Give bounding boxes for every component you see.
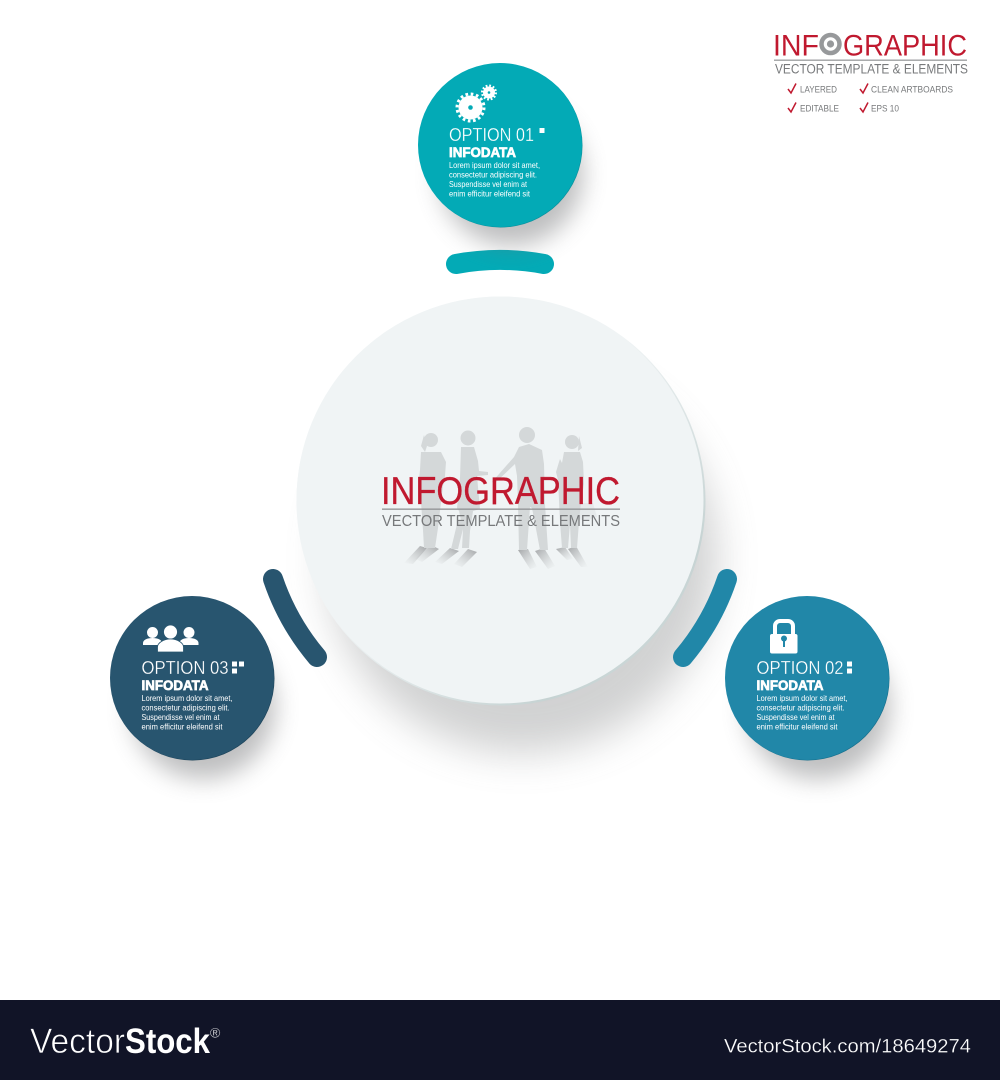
subheading: INFODATA <box>756 678 824 693</box>
option heading: OPTION 02 <box>756 657 844 678</box>
arc: teal connector <box>456 260 544 264</box>
subheading: INFODATA <box>142 678 209 693</box>
central subtitle: VECTOR TEMPLATE & ELEMENTS <box>382 513 620 530</box>
footer bar <box>0 1000 1000 1080</box>
option markers <box>232 662 244 674</box>
circle <box>418 63 582 228</box>
icon: group of people <box>143 625 198 652</box>
body text: Lorem ipsum dolor sit amet, <box>449 160 540 170</box>
footer logo: Vector <box>30 1022 125 1061</box>
figures <box>418 427 597 550</box>
logo subtitle: VECTOR TEMPLATE & ELEMENTS <box>775 62 968 76</box>
icon: target letter O <box>822 35 840 53</box>
arc: dark blue connector <box>273 579 317 657</box>
option markers <box>847 662 852 674</box>
icon: padlock <box>770 621 798 654</box>
circle shadow <box>439 102 583 246</box>
body text: consectetur adipiscing elit. <box>756 702 844 712</box>
panel: central circle <box>296 296 706 706</box>
circle shadow <box>746 635 890 779</box>
panel: option 02 <box>725 596 890 779</box>
option heading: OPTION 03 <box>142 657 228 678</box>
body text <box>449 160 540 198</box>
logo: infographic top right <box>773 30 968 114</box>
body text <box>142 693 232 732</box>
option marker <box>540 128 544 133</box>
foot shadows <box>404 545 588 569</box>
circle shadow <box>131 635 275 779</box>
shadow: central circle <box>327 363 717 753</box>
body text: enim efficitur eleifend sit <box>449 188 531 198</box>
feature checklist <box>788 84 953 114</box>
body text: Lorem ipsum dolor sit amet, <box>756 693 848 703</box>
central silhouettes: business people <box>404 427 597 569</box>
central rule <box>382 508 620 510</box>
body text: consectetur adipiscing elit. <box>449 170 537 180</box>
footer logo: ® <box>210 1024 221 1040</box>
icon: gears <box>457 86 496 121</box>
body text <box>756 693 848 732</box>
logo title: GRAPHIC <box>843 30 967 62</box>
circle <box>725 596 890 760</box>
feature checklist: EDITABLE <box>800 104 839 114</box>
logo rule <box>774 60 967 61</box>
footer logo <box>30 1022 221 1061</box>
arc: mid blue connector <box>683 579 727 657</box>
body text: consectetur adipiscing elit. <box>142 702 230 712</box>
panel: option 01 <box>418 63 583 246</box>
body text: Lorem ipsum dolor sit amet, <box>142 693 232 703</box>
logo title <box>773 30 967 62</box>
option heading: OPTION 01 <box>449 124 534 145</box>
footer logo: Stock <box>125 1022 210 1061</box>
feature checklist: LAYERED <box>800 84 837 94</box>
feature checklist: EPS 10 <box>871 104 899 114</box>
logo title: INF <box>773 30 819 62</box>
panel: option 03 <box>110 596 275 779</box>
feature checklist: CLEAN ARTBOARDS <box>871 84 953 94</box>
circle <box>110 596 274 760</box>
body text: Suspendisse vel enim at <box>449 179 528 189</box>
body text: enim efficitur eleifend sit <box>756 722 838 732</box>
body text: Suspendisse vel enim at <box>756 712 835 722</box>
central title: INFOGRAPHIC <box>381 470 620 513</box>
body text: Suspendisse vel enim at <box>142 712 220 722</box>
body text: enim efficitur eleifend sit <box>142 722 223 732</box>
subheading: INFODATA <box>449 145 516 160</box>
footer image id: VectorStock.com/18649274 <box>724 1036 971 1058</box>
